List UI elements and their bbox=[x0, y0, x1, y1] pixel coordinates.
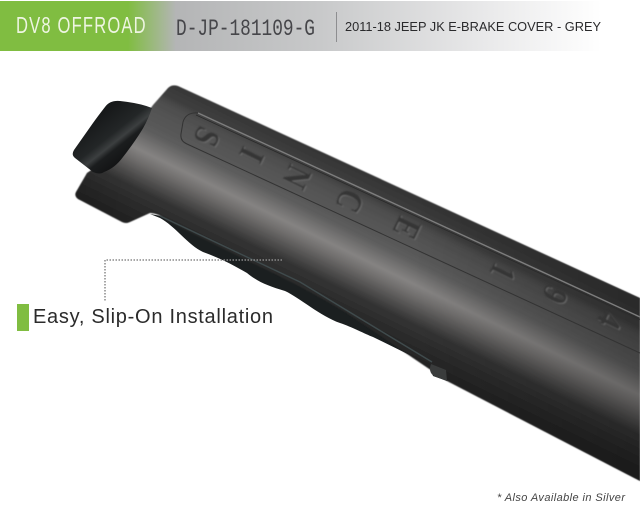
underside grip bbox=[150, 214, 470, 381]
embossed lettering: S bbox=[185, 121, 228, 152]
embossed lettering: C bbox=[328, 184, 373, 220]
product title: 2011-18 JEEP JK E-BRAKE COVER - GREY bbox=[345, 19, 601, 34]
callout leader line bbox=[105, 260, 282, 301]
brand name: DV8 OFFROAD bbox=[16, 13, 146, 39]
embossed lettering: N bbox=[274, 159, 319, 195]
lower lip bbox=[160, 216, 432, 362]
green marker bbox=[17, 304, 29, 331]
embossed lettering: 9 bbox=[533, 279, 575, 310]
embossed lettering: 4 bbox=[589, 305, 631, 336]
end cap bbox=[73, 101, 152, 174]
product photo: e-brake cover bbox=[73, 85, 640, 481]
embossed lettering: 1 bbox=[481, 256, 523, 287]
embossed lettering: 4 bbox=[588, 304, 630, 335]
embossed lettering: I bbox=[231, 141, 271, 168]
embossed lettering bbox=[185, 121, 631, 336]
callout: easy slip-on installation bbox=[17, 304, 273, 331]
callout text: Easy, Slip-On Installation bbox=[33, 306, 273, 328]
header bar bbox=[0, 1, 640, 51]
embossed lettering: N bbox=[275, 160, 320, 196]
embossed lettering: I bbox=[232, 142, 272, 169]
embossed lettering: 9 bbox=[534, 280, 576, 311]
part number: D-JP-181109-G bbox=[176, 16, 315, 42]
embossed border lines bbox=[181, 113, 640, 353]
footnote: * Also Available in Silver bbox=[497, 492, 626, 504]
tube body bbox=[75, 85, 640, 481]
embossed lettering: C bbox=[327, 183, 372, 219]
embossed lettering: 1 bbox=[482, 257, 524, 288]
embossed lettering: E bbox=[385, 211, 429, 246]
embossed lettering: S bbox=[186, 122, 229, 153]
embossed lettering: E bbox=[384, 210, 428, 245]
